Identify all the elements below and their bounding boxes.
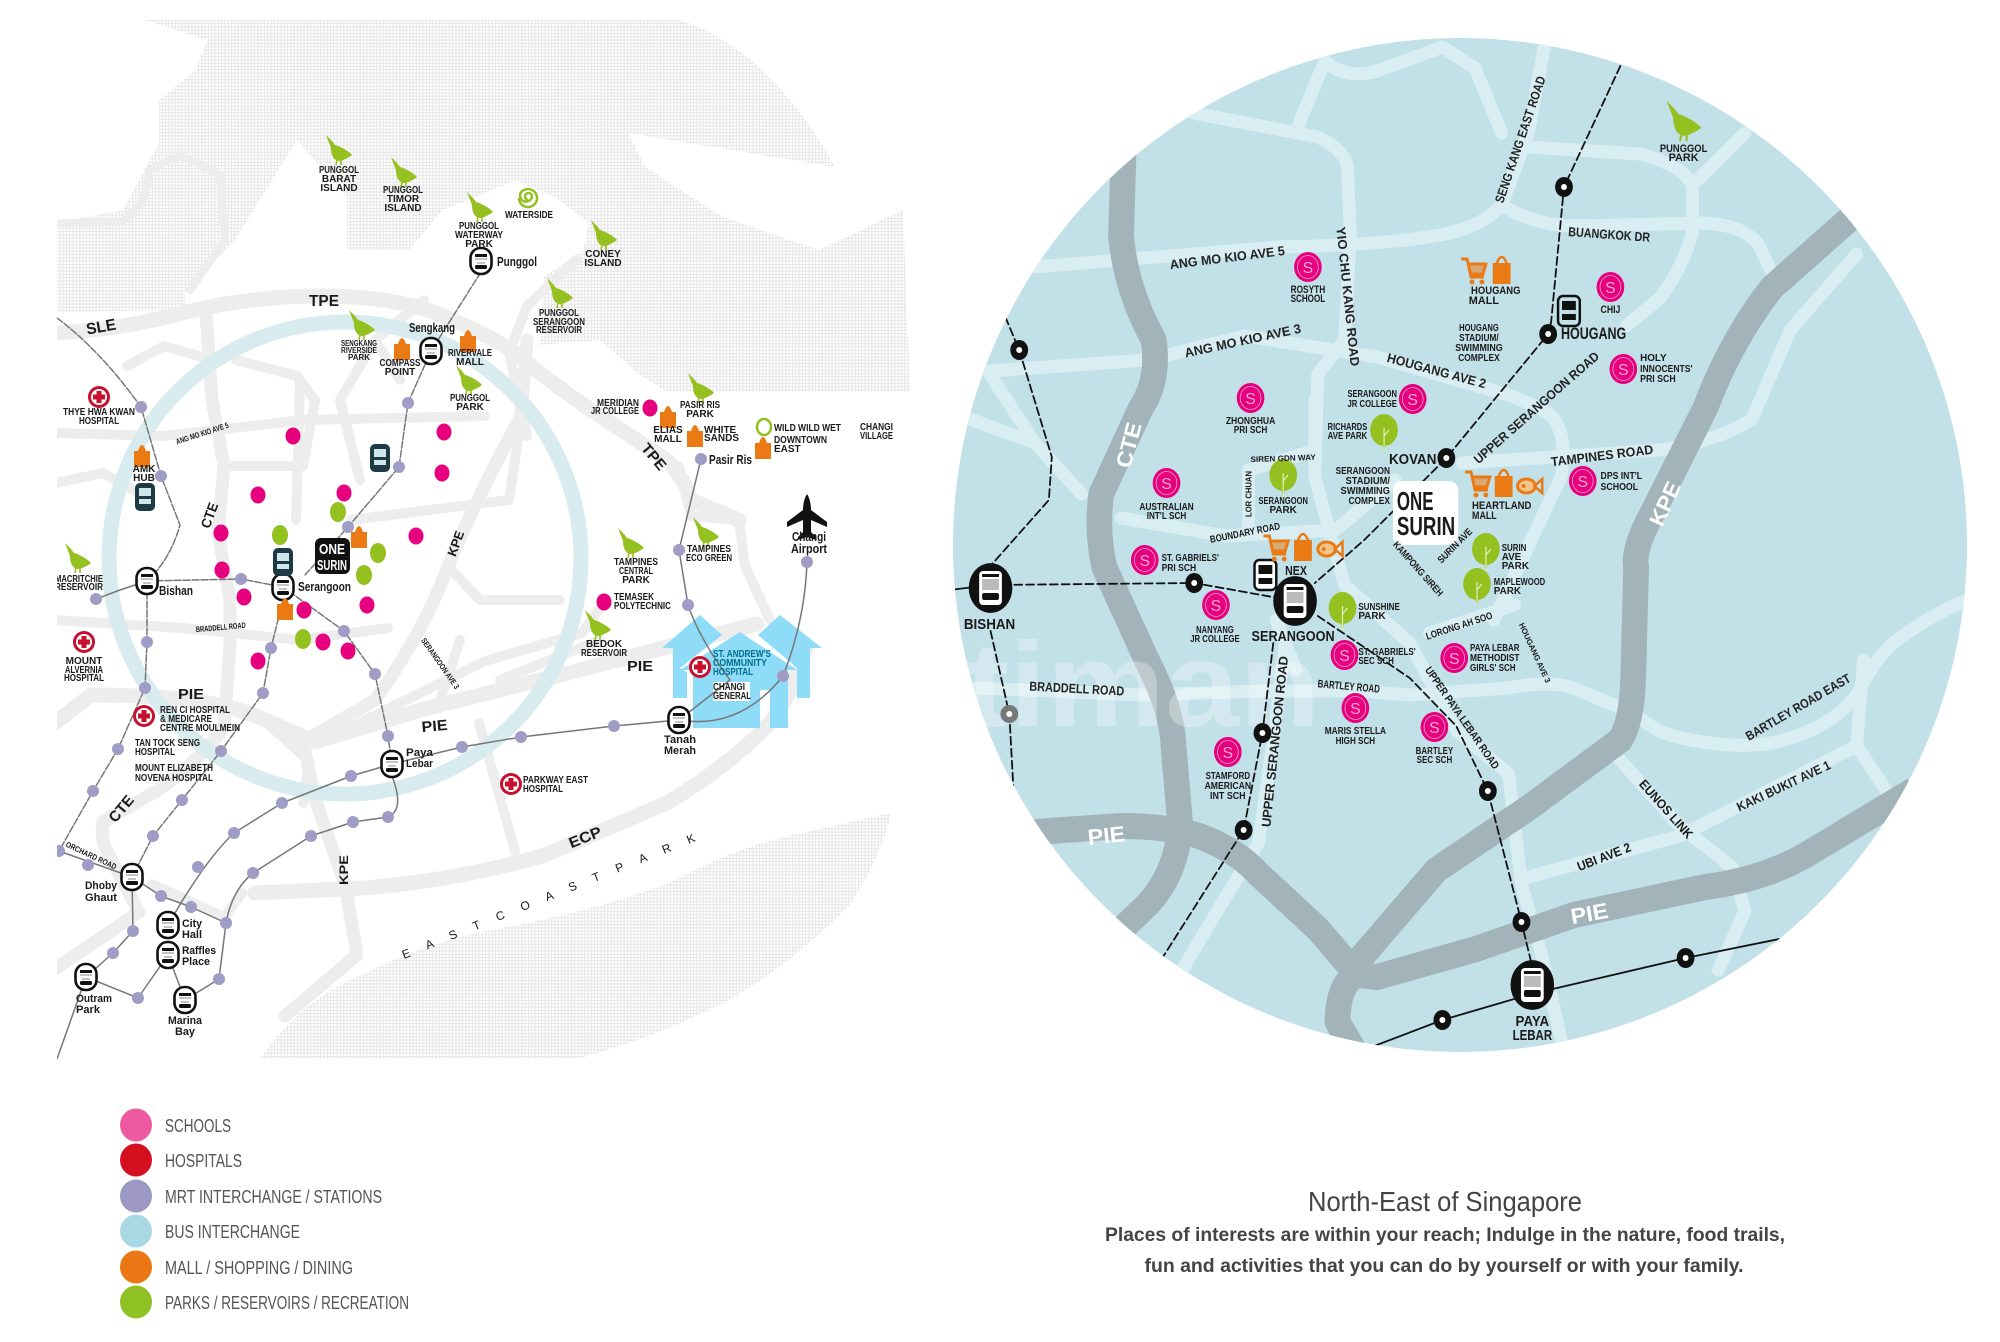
place labels north: JR COLLEGE bbox=[591, 406, 639, 417]
place labels central and east: Dhoby bbox=[85, 880, 118, 892]
place labels north half: PUNGGOL bbox=[1660, 143, 1708, 155]
place labels central and east: HOSPITAL bbox=[64, 673, 104, 684]
place labels north: CONEY bbox=[585, 249, 621, 260]
place labels central and east: HOSPITAL bbox=[523, 784, 563, 795]
place labels north: ISLAND bbox=[384, 203, 422, 214]
place labels north: PUNGGOL bbox=[319, 165, 359, 176]
expressway labels: PIE bbox=[1086, 821, 1126, 850]
icon: plane bbox=[787, 494, 827, 540]
legend: bus: BUS INTERCHANGE bbox=[165, 1222, 300, 1242]
place labels central and east: City bbox=[182, 918, 203, 930]
place labels south half: MAPLEWOOD bbox=[1494, 577, 1545, 588]
place labels north: DOWNTOWN bbox=[774, 435, 827, 446]
south sea dotted area bbox=[260, 813, 891, 1059]
road labels: SURIN AVE bbox=[1436, 526, 1475, 566]
place labels north: SENGKANG bbox=[341, 339, 377, 348]
place labels north: POINT bbox=[385, 367, 415, 378]
road labels: SENG KANG EAST ROAD bbox=[1492, 74, 1549, 205]
place labels central and east: HOSPITAL bbox=[713, 667, 753, 678]
place labels north half: DPS INT'L bbox=[1601, 471, 1642, 482]
place labels central and east: Marina bbox=[168, 1015, 203, 1027]
road labels: UBI AVE 2 bbox=[1575, 840, 1633, 874]
place labels south half: PARK bbox=[1502, 561, 1530, 572]
road labels: BRADDELL ROAD bbox=[1029, 678, 1125, 699]
place labels north: VILLAGE bbox=[860, 431, 893, 442]
place labels central and east: TEMASEK bbox=[614, 592, 655, 603]
expressway labels: PIE bbox=[1569, 898, 1610, 929]
road labels: KPE bbox=[444, 528, 467, 558]
school icons: S bbox=[1211, 598, 1221, 615]
One Surin badge small: ONE bbox=[319, 541, 345, 558]
One Surin badge bbox=[1393, 481, 1458, 545]
place labels north half: STADIUM/ bbox=[1459, 333, 1499, 344]
place labels north half: COMPLEX bbox=[1348, 496, 1390, 507]
place labels north: PARK bbox=[465, 239, 494, 250]
school icons: S bbox=[1339, 648, 1350, 665]
place labels north: THYE HWA KWAN bbox=[63, 407, 135, 418]
place labels south half: NANYANG bbox=[1196, 625, 1234, 636]
place labels north: Pasir Ris bbox=[709, 452, 752, 467]
place labels south half: AVE bbox=[1502, 552, 1522, 563]
place labels central and east: Place bbox=[182, 956, 210, 968]
road labels: LOR CHUAN bbox=[1245, 471, 1254, 517]
road labels: EUNOS LINK bbox=[1636, 776, 1697, 842]
road labels: BARTLEY ROAD bbox=[1317, 678, 1380, 696]
caption text block bbox=[1105, 1225, 1785, 1277]
place labels north half: MALL bbox=[1469, 295, 1499, 307]
place labels central and east bbox=[55, 529, 828, 1038]
legend: mall bbox=[120, 1250, 353, 1284]
place labels north half: ROSYTH bbox=[1291, 284, 1325, 296]
road labels: YIO CHU KANG ROAD bbox=[1333, 226, 1363, 367]
place labels north half: SWIMMING bbox=[1341, 486, 1390, 497]
place labels south half: STAMFORD bbox=[1206, 771, 1250, 782]
place labels north: WATERSIDE bbox=[505, 210, 553, 221]
place labels central and east: Serangoon bbox=[298, 579, 351, 594]
place labels north: ISLAND bbox=[584, 258, 622, 269]
place labels north half: SERANGOON bbox=[1336, 466, 1390, 477]
place labels north half: SCHOOL bbox=[1601, 482, 1638, 493]
place labels north half: INT'L SCH bbox=[1147, 511, 1186, 522]
place labels north half: INNOCENTS' bbox=[1640, 364, 1693, 375]
place labels north: SERANGOON bbox=[533, 317, 585, 328]
school icons: S bbox=[1139, 553, 1150, 570]
place labels north half: HEARTLAND bbox=[1472, 500, 1531, 512]
place labels central and east: ST. ANDREW'S bbox=[713, 649, 771, 660]
icon: wild wild wet ring bbox=[757, 419, 771, 435]
place labels north half: SWIMMING bbox=[1455, 343, 1503, 354]
place labels south half: SEC SCH bbox=[1358, 656, 1394, 667]
map disc bbox=[950, 35, 1970, 1055]
small stations bbox=[1000, 177, 1694, 1030]
road labels: ANG MO KIO AVE 5 bbox=[1169, 243, 1286, 272]
place labels north: COMPASS bbox=[380, 358, 421, 369]
place labels north half: AUSTRALIAN bbox=[1139, 502, 1194, 513]
place labels central and east: TAMPINES bbox=[687, 544, 731, 555]
hospital icons bbox=[73, 386, 711, 795]
place labels north half: MALL bbox=[1472, 510, 1497, 522]
place labels central and east: COMMUNITY bbox=[713, 658, 767, 669]
place labels south half: BISHAN bbox=[964, 617, 1015, 633]
place labels south half: PAYA bbox=[1516, 1014, 1549, 1030]
place labels central and east: Merah bbox=[664, 745, 696, 757]
road labels: CTE bbox=[105, 792, 138, 826]
road labels: TPE bbox=[637, 440, 670, 474]
place labels central and east: & MEDICARE bbox=[160, 714, 212, 725]
watermark: houses logo bbox=[662, 615, 822, 728]
One Surin badge small bbox=[315, 538, 350, 574]
place labels south half: LEBAR bbox=[1513, 1028, 1552, 1044]
place labels north: PUNGGOL bbox=[459, 221, 499, 232]
place labels north: HUB bbox=[133, 473, 155, 484]
caption text block: Places of interests are within your reach; Indulge in the nature, food trails, bbox=[1105, 1225, 1785, 1246]
tree icons bbox=[1269, 414, 1500, 632]
interchange stations bbox=[969, 563, 1554, 1010]
road labels: SLE bbox=[85, 317, 118, 339]
place labels central and east: CHANGI bbox=[713, 682, 745, 693]
place labels south half: METHODIST bbox=[1470, 653, 1519, 664]
road labels: KPE bbox=[337, 855, 351, 885]
bus interchange icons bbox=[135, 444, 390, 576]
MRT stations bbox=[53, 397, 813, 1004]
place labels north: MALL bbox=[456, 357, 484, 368]
legend: schools: SCHOOLS bbox=[165, 1116, 231, 1136]
place labels north half: PARK bbox=[1270, 505, 1298, 516]
place labels north half: JR COLLEGE bbox=[1347, 399, 1397, 410]
school icons: S bbox=[1618, 362, 1629, 379]
expressway labels: CTE bbox=[1111, 420, 1147, 471]
place labels south half: ST. GABRIELS' bbox=[1162, 553, 1219, 564]
place labels north half: SCHOOL bbox=[1291, 293, 1325, 305]
place labels north: RIVERVALE bbox=[448, 348, 492, 359]
place labels central and east: Paya bbox=[406, 747, 434, 759]
school icons: S bbox=[1245, 391, 1256, 408]
road labels: UPPER PAYA LEBAR ROAD bbox=[1422, 665, 1501, 772]
road labels: TPE bbox=[309, 293, 339, 310]
road labels: BRADDELL ROAD bbox=[195, 621, 246, 634]
place labels central and east: Bishan bbox=[159, 583, 193, 598]
place labels south half: NEX bbox=[1285, 563, 1307, 578]
place labels north half: CHIJ bbox=[1601, 304, 1620, 316]
ring around the 5km radius bbox=[109, 322, 581, 794]
legend: mall: MALL / SHOPPING / DINING bbox=[165, 1258, 353, 1278]
place labels north: WATERWAY bbox=[455, 230, 503, 241]
place labels north: PUNGGOL bbox=[539, 308, 579, 319]
school icons: S bbox=[1407, 392, 1418, 409]
place labels north half: COMPLEX bbox=[1458, 353, 1500, 364]
place labels central and east: ECO GREEN bbox=[686, 553, 732, 564]
place labels south half: BARTLEY bbox=[1416, 746, 1454, 757]
road labels: CTE bbox=[197, 500, 221, 530]
school icons: S bbox=[1350, 701, 1361, 718]
place labels south half bbox=[964, 543, 1552, 1044]
place labels north: MALL bbox=[654, 434, 682, 445]
place labels north: MERIDIAN bbox=[597, 398, 639, 409]
place labels central and east: TAN TOCK SENG bbox=[135, 738, 200, 749]
road labels: HOUGANG AVE 2 bbox=[1385, 350, 1488, 391]
place labels central and east: Park bbox=[76, 1004, 101, 1016]
map content bbox=[950, 47, 1973, 1056]
place labels central and east: PARKWAY EAST bbox=[523, 775, 588, 786]
road network bbox=[55, 155, 806, 1016]
place labels north half: PARK bbox=[1669, 152, 1699, 164]
expressway labels: KPE bbox=[1644, 478, 1686, 530]
school icons: S bbox=[1161, 476, 1172, 493]
place labels north half: ZHONGHUA bbox=[1226, 416, 1275, 427]
place labels south half: PAYA LEBAR bbox=[1470, 643, 1519, 654]
road labels: E A S T C O A S T P A R K bbox=[400, 831, 697, 962]
road labels: UPPER SERANGOON ROAD bbox=[1258, 655, 1291, 828]
legend: parks: PARKS / RESERVOIRS / RECREATION bbox=[165, 1293, 409, 1313]
place labels south half: PRI SCH bbox=[1162, 563, 1196, 574]
place labels north: CHANGI bbox=[860, 422, 893, 433]
place labels north half: HOUGANG bbox=[1471, 285, 1520, 297]
place labels central and east: PARK bbox=[622, 575, 651, 586]
place labels north: PARK bbox=[456, 402, 485, 413]
icon: waterside spiral bbox=[519, 189, 537, 207]
place labels south half: INT SCH bbox=[1210, 791, 1246, 802]
place labels north: AMK bbox=[133, 464, 156, 475]
bus icons bbox=[1255, 296, 1580, 590]
place labels south half: SUNSHINE bbox=[1358, 602, 1400, 613]
place labels north half: HOUGANG bbox=[1459, 323, 1499, 334]
place labels north half: RICHARDS bbox=[1328, 422, 1368, 433]
road labels: BUANGKOK DR bbox=[1568, 224, 1651, 245]
place labels north: Punggol bbox=[497, 254, 537, 269]
panel: legend bbox=[120, 1108, 409, 1318]
place labels south half: MARIS STELLA bbox=[1325, 726, 1386, 737]
place labels north: PARK bbox=[686, 409, 715, 420]
legend: MRT bbox=[120, 1180, 382, 1212]
place labels central and east: GENERAL bbox=[713, 691, 751, 702]
place labels central and east: HOSPITAL bbox=[135, 747, 175, 758]
place labels south half: SURIN bbox=[1502, 543, 1526, 554]
place labels south half: SEC SCH bbox=[1417, 755, 1452, 766]
watermark text: timan bbox=[965, 618, 1321, 752]
place labels south half: JR COLLEGE bbox=[1190, 634, 1240, 645]
place labels north: SANDS bbox=[704, 433, 739, 444]
place labels central and east: Changi bbox=[792, 529, 826, 544]
place labels central and east: RESERVOIR bbox=[581, 648, 628, 659]
expressway labels bbox=[1086, 420, 1686, 929]
place labels central and east: REN CI HOSPITAL bbox=[160, 705, 230, 716]
road labels: PIE bbox=[178, 686, 204, 703]
road labels: KAKI BUKIT AVE 1 bbox=[1734, 757, 1833, 814]
place labels central and east: Tanah bbox=[664, 734, 696, 746]
place labels north: HOSPITAL bbox=[79, 416, 119, 427]
legend: schools bbox=[120, 1108, 231, 1142]
place labels north: ELIAS bbox=[653, 425, 683, 436]
road labels: SERANGOON AVE 3 bbox=[419, 636, 461, 691]
place labels central and east: POLYTECHNIC bbox=[614, 601, 671, 612]
place labels north: BARAT bbox=[322, 174, 356, 185]
place labels south half: ST. GABRIELS' bbox=[1358, 647, 1416, 658]
school icons: S bbox=[1605, 280, 1616, 297]
caption bbox=[1105, 1186, 1785, 1277]
place labels central and east: MOUNT bbox=[66, 656, 102, 667]
place labels north half: SERANGOON bbox=[1347, 389, 1397, 400]
place labels central and east: CENTRAL bbox=[619, 566, 653, 577]
caption text block: fun and activities that you can do by yourself or with your family. bbox=[1144, 1256, 1744, 1277]
road labels: ANG MO KIO AVE 5 bbox=[175, 421, 230, 446]
icon: Punggol Park bird bbox=[1667, 101, 1701, 141]
place labels south half: GIRLS' SCH bbox=[1470, 663, 1516, 674]
place labels north: PASIR RIS bbox=[680, 400, 720, 411]
MRT lines bbox=[57, 272, 807, 1059]
place labels central and east: ALVERNIA bbox=[65, 665, 103, 676]
road labels bbox=[64, 293, 697, 962]
road labels: SIREN GDN WAY bbox=[1250, 453, 1317, 464]
place labels north half: KOVAN bbox=[1389, 452, 1436, 468]
place labels central and east: Raffles bbox=[182, 945, 216, 957]
place labels central and east: MACRITCHIE bbox=[55, 574, 103, 585]
rail lines bbox=[950, 66, 1780, 1046]
place labels south half: AMERICAN bbox=[1205, 781, 1251, 792]
caption heading: North-East of Singapore bbox=[1308, 1186, 1582, 1217]
park tree dots bbox=[272, 502, 386, 649]
place labels central and east: Airport bbox=[791, 541, 828, 556]
place labels north half: SERANGOON bbox=[1258, 496, 1308, 507]
road labels: ORCHARD ROAD bbox=[64, 840, 118, 872]
One Surin badge: ONE bbox=[1397, 488, 1433, 516]
interchange stations bbox=[76, 248, 690, 1013]
place labels north: WHITE bbox=[704, 425, 737, 436]
legend: MRT: MRT INTERCHANGE / STATIONS bbox=[165, 1187, 382, 1207]
place labels central and east: TAMPINES bbox=[614, 557, 658, 568]
One Surin badge: SURIN bbox=[1397, 513, 1455, 541]
legend: hospitals bbox=[120, 1144, 242, 1176]
legend: parks bbox=[120, 1286, 409, 1318]
road labels: KAMPONG SIREH bbox=[1390, 540, 1445, 599]
place labels north half: PRI SCH bbox=[1640, 374, 1676, 385]
north sea dotted area bbox=[56, 20, 910, 392]
place labels central and east: Lebar bbox=[406, 758, 434, 770]
mall icons bbox=[1263, 257, 1542, 562]
place labels central and east: Ghaut bbox=[85, 892, 117, 904]
panel: North-East detail circular map bbox=[950, 35, 1973, 1056]
road labels: HOUGANG AVE 3 bbox=[1517, 622, 1552, 685]
road labels: LORONG AH SOO bbox=[1425, 610, 1494, 643]
minor roads bbox=[970, 47, 1973, 1039]
place labels central and east: Hall bbox=[182, 929, 202, 941]
place labels central and east: Outram bbox=[76, 993, 112, 1005]
school markers bbox=[214, 400, 658, 670]
road labels: UPPER SERANGOON ROAD bbox=[1471, 348, 1602, 467]
place labels central and east: RESERVOIR bbox=[55, 582, 104, 593]
park bird icons bbox=[65, 135, 719, 640]
place labels north bbox=[63, 165, 893, 484]
place labels north half bbox=[1139, 143, 1708, 522]
place labels central and east: Bay bbox=[175, 1026, 196, 1038]
place labels north half: AVE PARK bbox=[1328, 431, 1368, 442]
place labels south half: HIGH SCH bbox=[1336, 736, 1375, 747]
place labels north: Sengkang bbox=[409, 320, 455, 335]
road labels: ANG MO KIO AVE 3 bbox=[1183, 321, 1302, 360]
place labels north: RIVERSIDE bbox=[341, 346, 378, 355]
road labels: BARTLEY ROAD EAST bbox=[1743, 671, 1853, 744]
place labels north: EAST bbox=[774, 444, 801, 455]
road labels: ECP bbox=[566, 824, 604, 852]
place labels north: PUNGGOL bbox=[383, 185, 423, 196]
place labels north half: PRI SCH bbox=[1234, 425, 1267, 436]
road labels: BOUNDARY ROAD bbox=[1209, 521, 1281, 546]
place labels south half: PARK bbox=[1494, 586, 1522, 597]
school icons: S bbox=[1577, 474, 1588, 491]
legend: hospitals: HOSPITALS bbox=[165, 1151, 242, 1171]
place labels north: RESERVOIR bbox=[536, 325, 583, 336]
expressways bbox=[1035, 140, 1914, 1056]
school icons: S bbox=[1449, 651, 1460, 668]
place labels north: PUNGGOL bbox=[450, 393, 490, 404]
One Surin badge small: SURIN bbox=[317, 557, 347, 574]
road labels: TAMPINES ROAD bbox=[1550, 442, 1654, 469]
mall icons bbox=[134, 330, 771, 620]
place labels north: TIMOR bbox=[387, 194, 420, 205]
place labels south half: PARK bbox=[1358, 611, 1386, 622]
place labels south half: SERANGOON bbox=[1252, 629, 1335, 645]
place labels north half: HOLY bbox=[1640, 353, 1667, 364]
place labels central and east: NOVENA HOSPITAL bbox=[135, 773, 213, 784]
school icons: S bbox=[1303, 260, 1313, 277]
legend: bus bbox=[120, 1214, 300, 1248]
road labels: PIE bbox=[627, 658, 653, 675]
road labels: PIE bbox=[421, 717, 448, 736]
place labels north: PARK bbox=[348, 353, 370, 362]
place labels north half: HOUGANG bbox=[1561, 324, 1626, 343]
place labels central and east: MOUNT ELIZABETH bbox=[135, 763, 213, 774]
place labels central and east: BEDOK bbox=[586, 639, 623, 650]
place labels north half: STADIUM/ bbox=[1345, 476, 1390, 487]
place labels central and east: CENTRE MOULMEIN bbox=[160, 723, 240, 734]
place labels north: ISLAND bbox=[320, 183, 358, 194]
school icons: S bbox=[1223, 745, 1233, 762]
panel: regional map of Singapore bbox=[53, 20, 910, 1059]
white channel and mainland coast bbox=[57, 133, 903, 400]
school icons: S bbox=[1429, 720, 1440, 737]
place labels north: WILD WILD WET bbox=[774, 423, 841, 434]
school icons bbox=[1131, 252, 1637, 767]
road labels bbox=[1029, 74, 1853, 874]
